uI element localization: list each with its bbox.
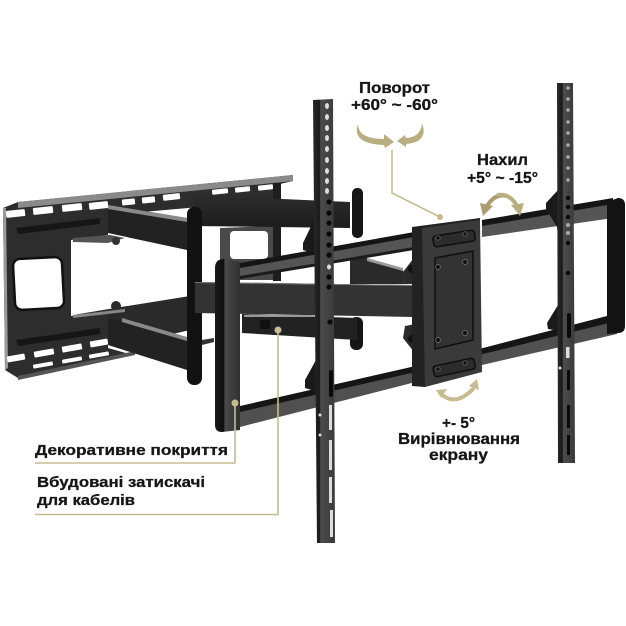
label: screen leveling: екрану [429,447,488,464]
callout line: rotation [392,150,443,220]
label: screen leveling: +- 5° [442,415,475,432]
label: built-in cable clips [37,474,205,509]
back arm lower [73,296,363,370]
label: tilt: Нахил [477,152,528,169]
label: built-in cable clips: для кабелів [37,492,135,509]
icon: tilt arrows [480,195,524,216]
label: swivel: +60° ~ -60° [351,97,438,114]
icon: swivel arrows [357,123,424,148]
label: built-in cable clips: Вбудовані затискачі [37,474,205,491]
label: decorative cover: Декоративне покриття [35,442,228,459]
label: tilt: +5° ~ -15° [467,170,538,187]
wall plate [3,175,293,380]
pivot knuckles [403,257,421,353]
centre VESA plate [412,218,482,387]
icon: leveling arrow [436,379,479,399]
callout line: cable clips [35,326,282,514]
middle arm [195,282,413,340]
elbow post [187,207,202,385]
label: screen leveling [398,415,520,464]
label: swivel: Поворот [359,80,430,97]
label: swivel [351,80,438,114]
right vertical rail [546,83,575,463]
label: tilt [467,152,538,187]
outer frame [215,198,625,432]
left vertical rail [303,99,335,543]
back arm upper [73,183,405,284]
label: screen leveling: Вирівнювання [398,431,520,448]
callout line: decorative cover [35,400,238,463]
